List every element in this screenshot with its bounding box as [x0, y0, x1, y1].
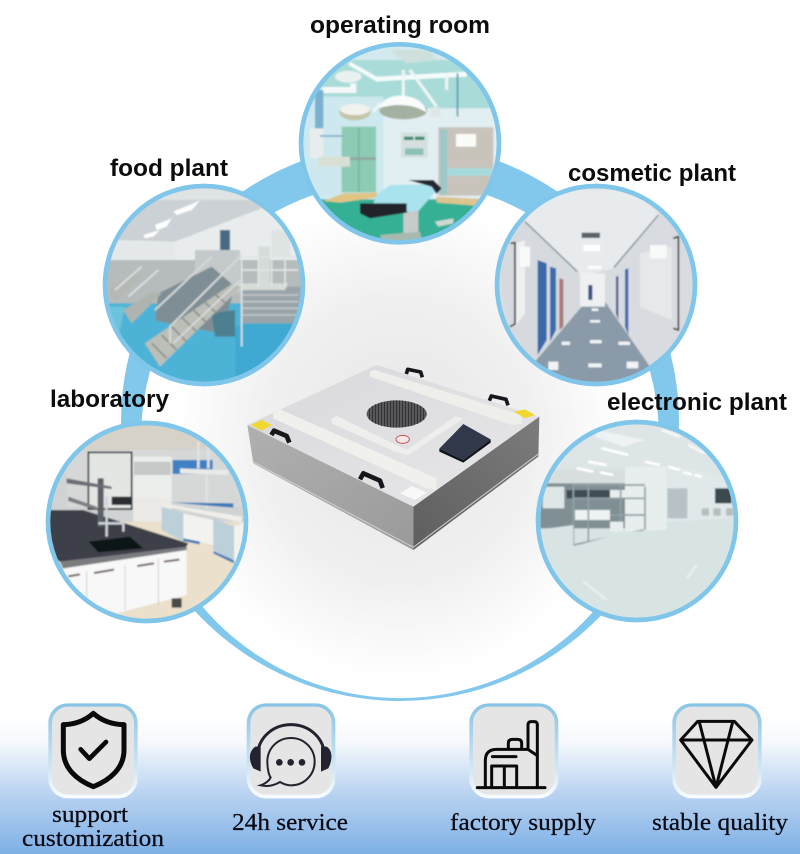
feature tile: 24h service: [247, 703, 335, 798]
feature tile: factory supply: [469, 703, 558, 798]
icon: shield with check: [63, 713, 124, 787]
label: support customization: customization: [22, 826, 164, 852]
label: support customization: support: [52, 802, 128, 828]
tile: [469, 703, 558, 798]
right face: [413, 417, 539, 550]
heading: laboratory: laboratory: [50, 386, 170, 413]
control box: [439, 424, 491, 460]
white rails: [273, 409, 437, 489]
photo: electronic plant: [530, 415, 743, 628]
tile: [48, 703, 138, 798]
top face: [247, 365, 539, 507]
label: stable quality: stable quality: [652, 810, 788, 836]
photo: cosmetic plant: [490, 180, 703, 393]
product: fan filter unit: [247, 365, 539, 550]
heading: operating room: operating room: [310, 12, 490, 39]
product glow: [173, 200, 623, 680]
heading: cosmetic plant: cosmetic plant: [568, 160, 736, 187]
label: factory supply: factory supply: [450, 810, 596, 836]
handles: [406, 369, 422, 377]
left face: [247, 425, 413, 550]
photo: food plant: [95, 180, 308, 393]
feature tile: support customization: [48, 703, 138, 798]
icon: diamond: [681, 721, 752, 787]
bottom gradient band: [0, 714, 800, 854]
label: 24h service: 24h service: [232, 810, 348, 836]
heading: food plant: food plant: [110, 155, 228, 182]
tile: [247, 703, 335, 798]
icon: headset chat bubble: [250, 725, 331, 786]
white label: [400, 486, 427, 500]
heading: electronic plant: electronic plant: [607, 389, 787, 416]
photo: laboratory: [40, 415, 253, 628]
warning label: [396, 435, 409, 443]
label: support customization: [22, 802, 164, 852]
photo: operating room: [298, 42, 502, 245]
feature tile: stable quality: [672, 703, 762, 798]
fan grille: [367, 400, 427, 428]
icon: factory: [477, 722, 545, 788]
yellow stickers: [251, 420, 272, 431]
tile: [672, 703, 762, 798]
connecting ring: [121, 143, 679, 701]
